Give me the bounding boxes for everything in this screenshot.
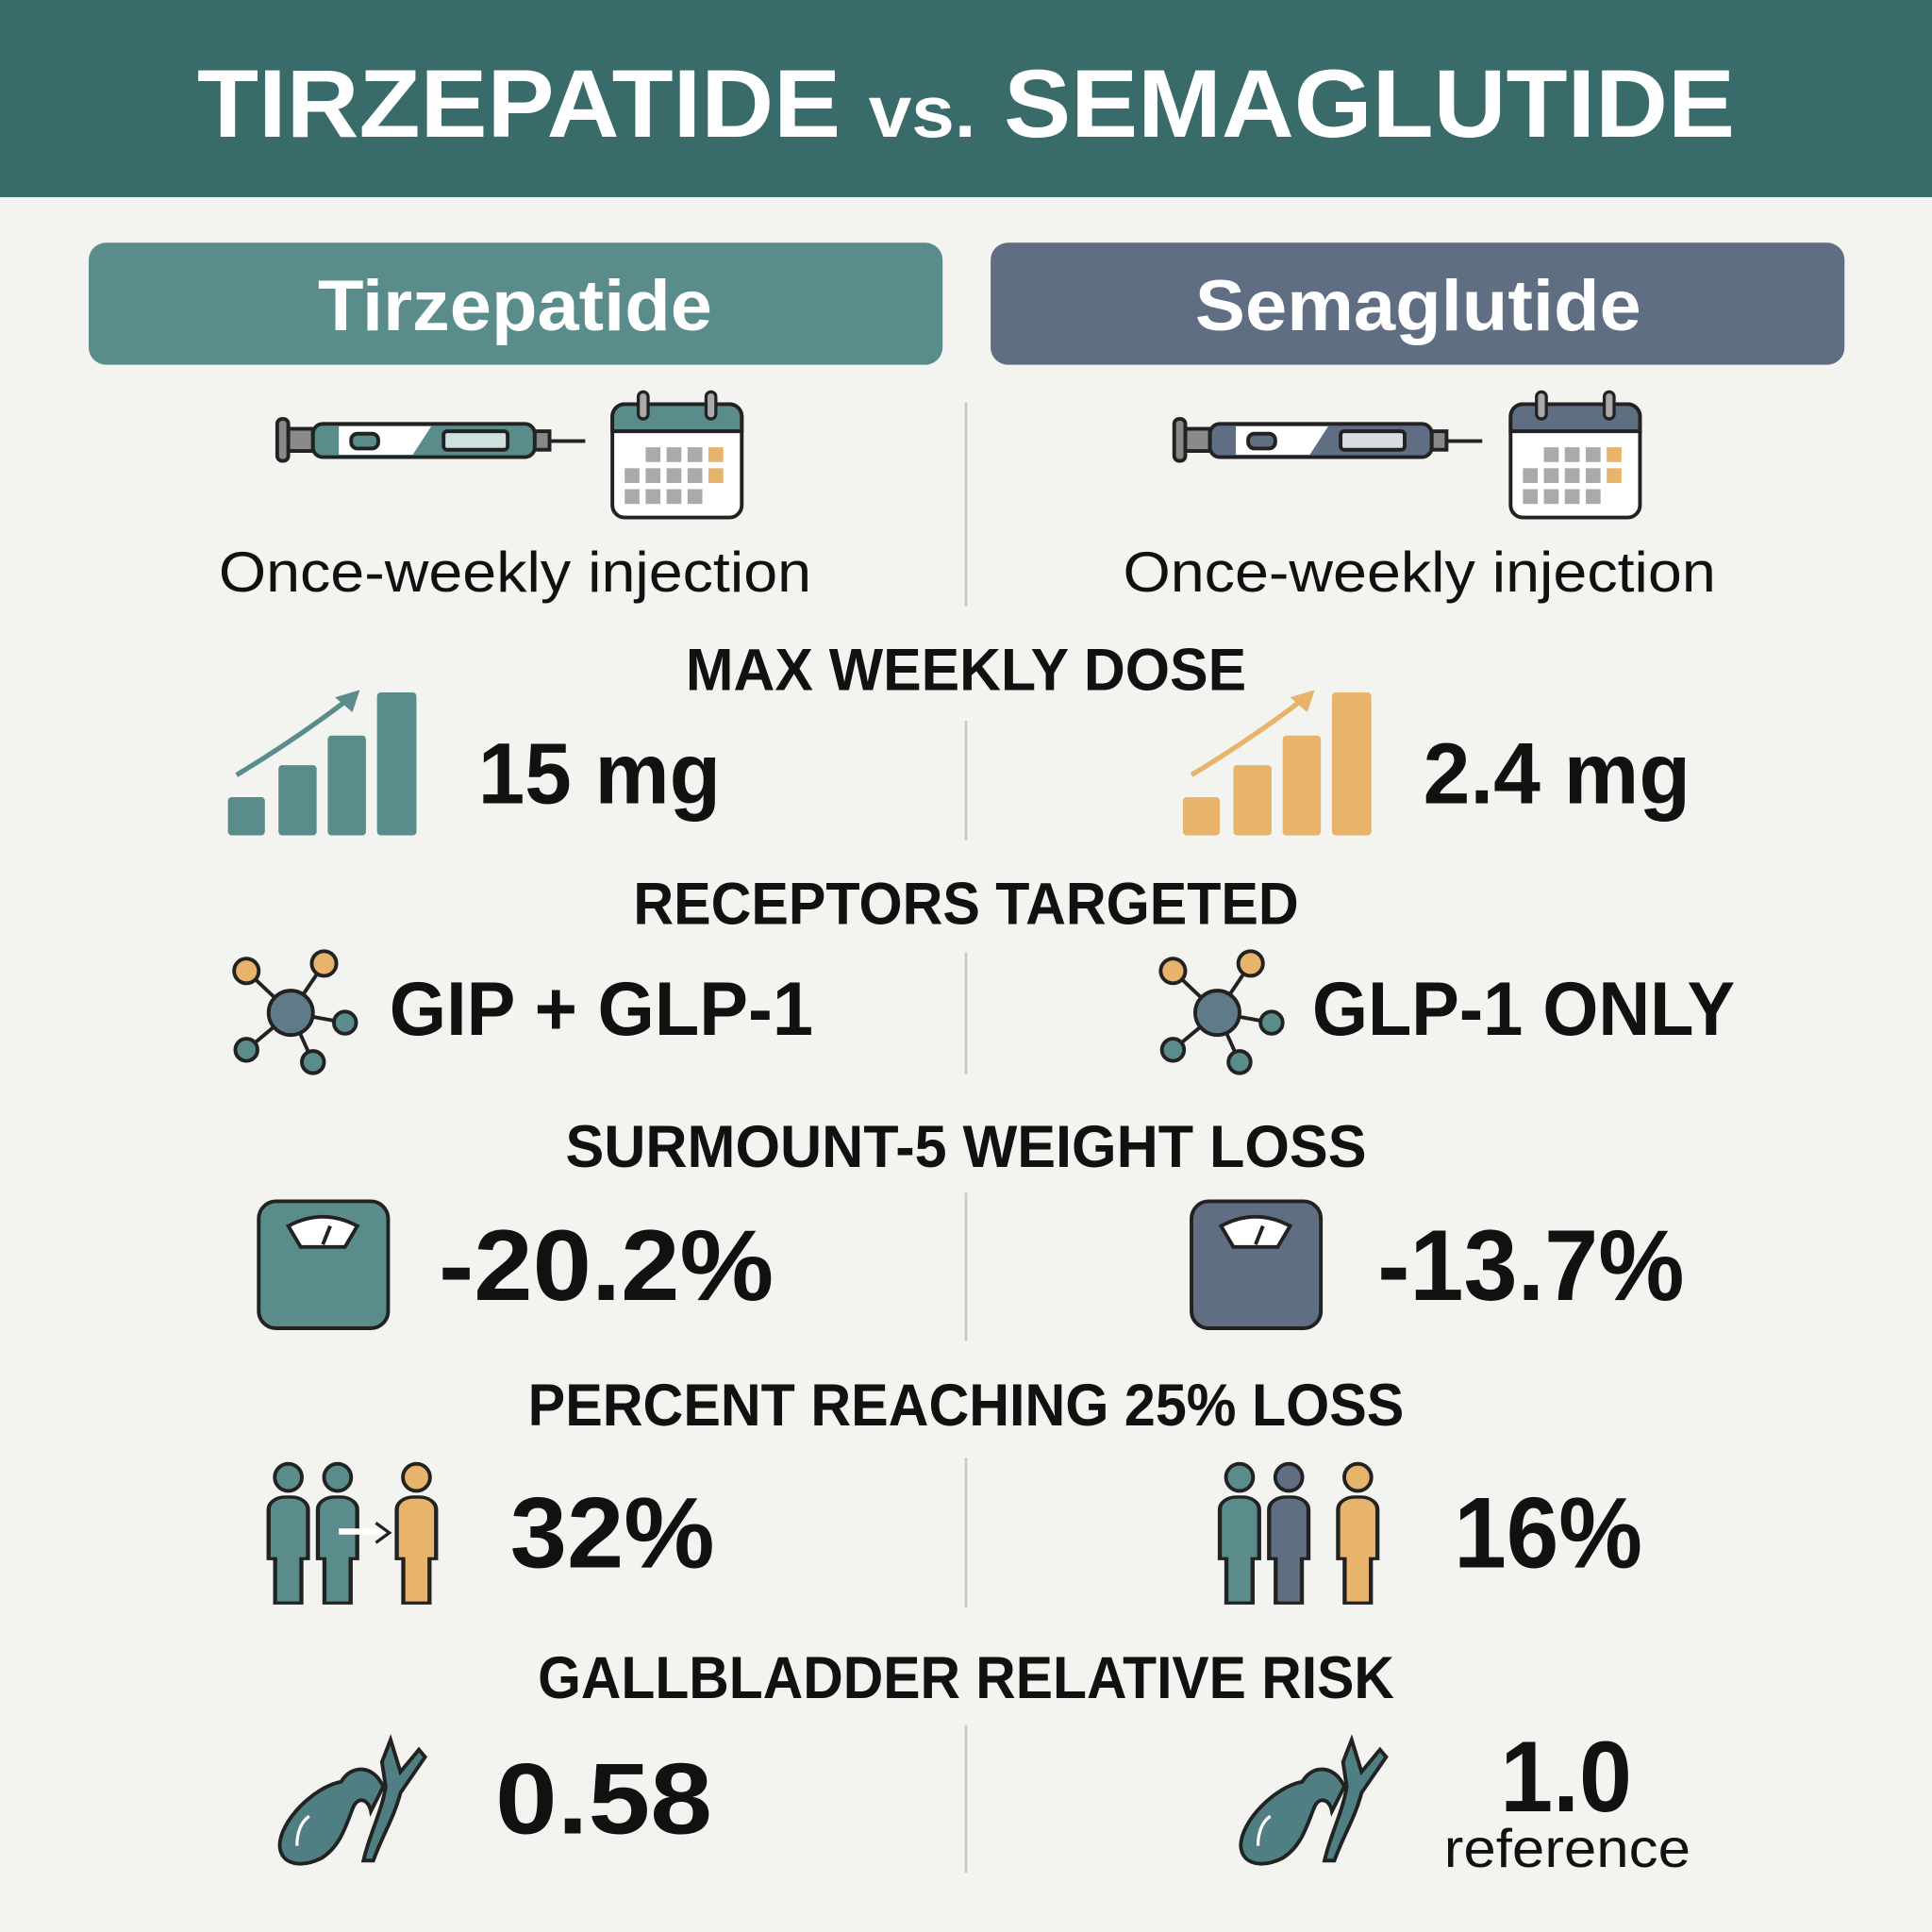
value: 16%: 16% <box>1454 1475 1642 1589</box>
icon: people left <box>269 1464 436 1603</box>
icon: gallbladder right <box>1241 1740 1386 1864</box>
pill: Tirzepatide <box>89 242 942 365</box>
value: 15 mg: 15 mg <box>478 726 721 823</box>
value: -13.7%: -13.7% <box>1377 1208 1684 1322</box>
icon: bar chart teal <box>228 690 416 836</box>
icon: molecule right <box>1160 951 1283 1074</box>
icon: people right <box>1220 1464 1377 1603</box>
icon: gallbladder left <box>279 1740 425 1864</box>
text: dosing left: Once-weekly injection <box>219 541 811 604</box>
value: GLP-1 ONLY: GLP-1 ONLY <box>1312 967 1735 1052</box>
value: 0.58: 0.58 <box>495 1742 712 1856</box>
value: 32%: 32% <box>510 1475 715 1589</box>
text: dosing right: Once-weekly injection <box>1124 541 1716 604</box>
value: 1.0 reference <box>1444 1720 1690 1879</box>
value: 1.0 reference: 1.0 <box>1500 1720 1632 1833</box>
title: TIRZEPATIDE vs. SEMAGLUTIDE <box>197 50 1735 158</box>
icon: scale right <box>1191 1201 1321 1328</box>
icon: molecule left <box>234 951 356 1074</box>
heading: receptors: RECEPTORS TARGETED <box>633 872 1299 938</box>
value: -20.2%: -20.2% <box>439 1208 774 1322</box>
heading: max weekly dose: MAX WEEKLY DOSE <box>686 637 1246 703</box>
icon: bar chart orange <box>1183 690 1372 836</box>
heading: surmount-5: SURMOUNT-5 WEIGHT LOSS <box>566 1114 1366 1180</box>
value: GIP + GLP-1: GIP + GLP-1 <box>390 967 813 1052</box>
pill: Semaglutide <box>991 242 1844 365</box>
icon: pen + calendar (left) <box>277 391 741 518</box>
value: 1.0 reference: reference <box>1444 1819 1690 1879</box>
value: 2.4 mg: 2.4 mg <box>1424 726 1690 823</box>
heading: percent reaching: PERCENT REACHING 25% LOSS <box>528 1373 1404 1439</box>
icon: scale left <box>258 1201 388 1328</box>
icon: pen + calendar (right) <box>1174 391 1640 518</box>
pill: Semaglutide: Semaglutide <box>1195 266 1641 346</box>
pill: Tirzepatide: Tirzepatide <box>318 266 712 346</box>
heading: gallbladder: GALLBLADDER RELATIVE RISK <box>538 1645 1394 1711</box>
header banner <box>0 0 1932 197</box>
